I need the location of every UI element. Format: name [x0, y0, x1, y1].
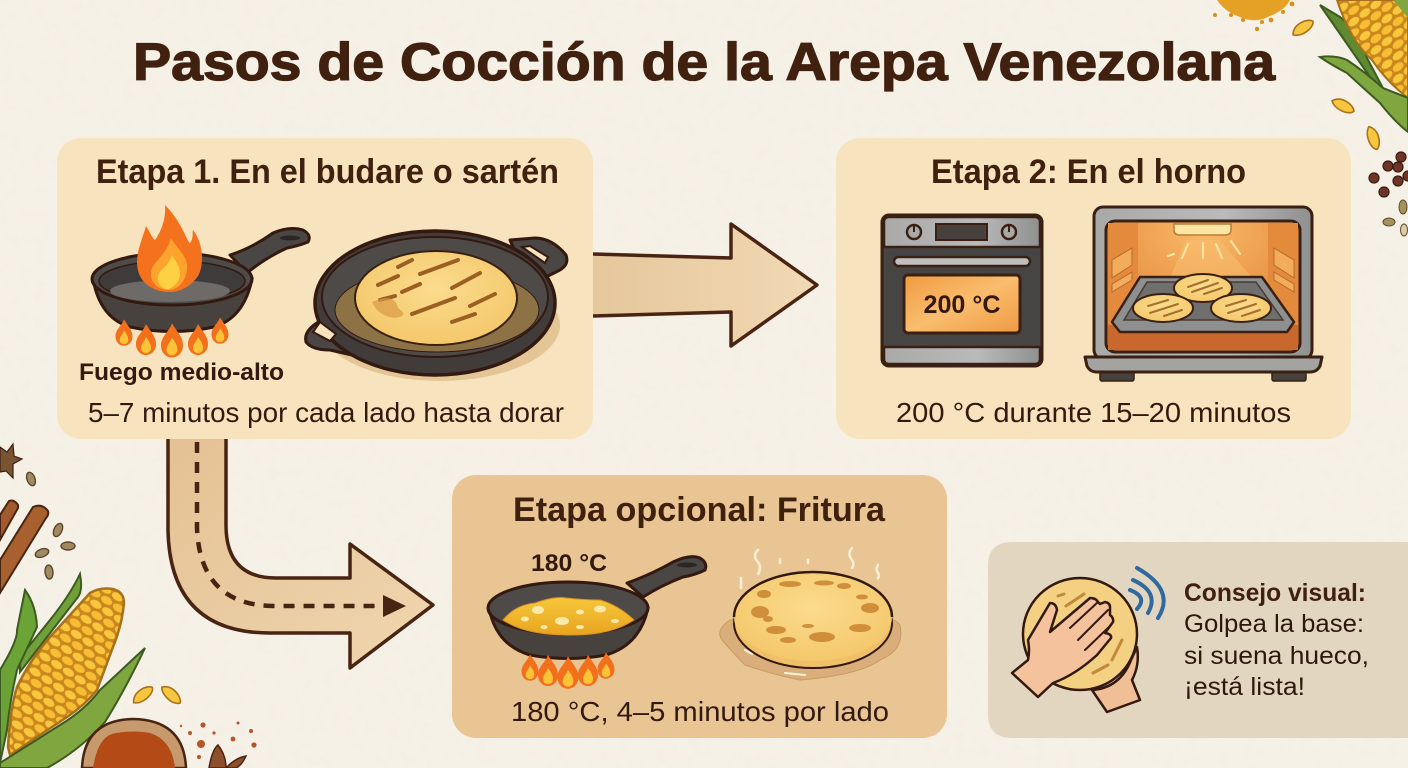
icon: open oven with arepas	[1085, 207, 1322, 381]
text: consejo: si suena hueco,	[1184, 642, 1369, 670]
text: consejo: ¡está lista!	[1184, 673, 1305, 701]
icon: sound waves	[1130, 568, 1164, 618]
decoration: top right corn and spices	[1213, 0, 1408, 236]
label: fuego medio-alto: Fuego medio-alto	[79, 359, 284, 386]
panel: etapa 2	[836, 138, 1351, 439]
text: consejo: Golpea la base:	[1184, 610, 1364, 638]
text: tiempo en budare: 5–7 minutos por cada lado hasta dorar	[88, 397, 564, 428]
heading: etapa opcional: Etapa opcional: Fritura	[513, 491, 886, 529]
icon: large flame	[137, 205, 202, 292]
heading: etapa 2: Etapa 2: En el horno	[931, 153, 1246, 191]
decoration: bottom left corn and spices	[0, 444, 257, 768]
text: consejo: Consejo visual:	[1184, 579, 1366, 607]
arrow: etapa 1 to etapa 2	[593, 224, 817, 346]
heading: etapa 1: Etapa 1. En el budare o sartén	[96, 153, 559, 191]
label: 180 °C: 180 °C	[531, 550, 607, 577]
icon: burner flames	[522, 652, 614, 689]
icon: small pan with flame	[92, 205, 309, 358]
title: Pasos de Cocción de la Arepa Venezolana	[133, 33, 1276, 92]
arrow: etapa 1 to fritura	[168, 438, 433, 668]
label: 200 °C: 200 °C	[924, 291, 1000, 319]
panel: consejo visual	[988, 542, 1408, 738]
icon: fried arepa	[720, 548, 901, 680]
panel: etapa 1	[57, 138, 593, 439]
panel: etapa opcional fritura	[452, 475, 947, 738]
icon: frying pan with oil	[488, 557, 706, 689]
text: consejo	[1184, 579, 1369, 701]
text: tiempo en horno: 200 °C durante 15–20 minutos	[896, 397, 1291, 428]
icon: large pan with arepa	[306, 231, 567, 381]
icon: burner flames	[116, 317, 228, 358]
text: tiempo fritura: 180 °C, 4–5 minutos por lado	[511, 696, 889, 727]
icon: closed oven	[882, 215, 1042, 366]
icon: hands tapping arepa	[1012, 568, 1164, 712]
